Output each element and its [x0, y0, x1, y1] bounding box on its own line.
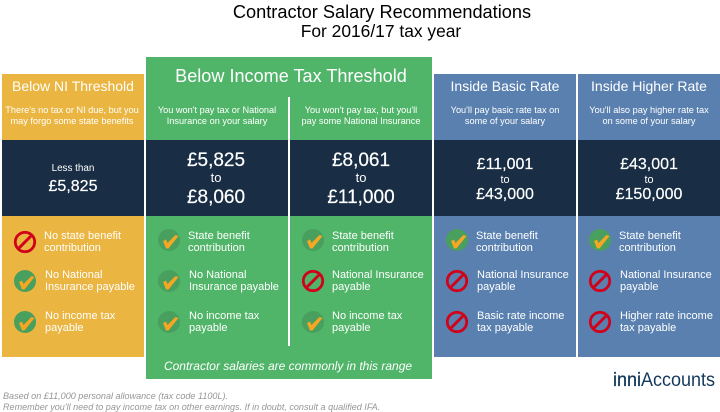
panel heading: below income tax threshold: Below Income Tax Threshold — [175, 66, 407, 86]
description: may forgo some state benefits — [10, 116, 134, 126]
description: some of your salary — [465, 116, 545, 126]
salary range: £11,001 — [477, 156, 533, 173]
salary range: column 1: £5,825 — [187, 150, 245, 171]
salary range: column 2: £11,000 — [327, 187, 395, 208]
description: column 1: Insurance on your salary — [167, 116, 268, 126]
item list: State benefit — [476, 230, 538, 242]
description: column 1 — [158, 105, 276, 126]
item list: Higher rate income — [620, 310, 713, 322]
salary range: column 2: £8,061 — [332, 150, 390, 171]
item list: column 2: payable — [332, 281, 371, 293]
item list: contribution — [619, 242, 676, 254]
item list: column 2: No income tax — [332, 310, 403, 322]
item list: column 1: contribution — [188, 242, 245, 254]
salary range: column 1 — [187, 150, 245, 208]
item list: column 2: payable — [332, 322, 371, 334]
footnote: Remember you'll need to pay income tax on other earnings. If in doubt, consult a qualified IFA. — [3, 402, 380, 412]
panel heading: inside basic rate: Inside Basic Rate — [451, 78, 560, 94]
item list: column 1 — [158, 229, 279, 334]
panel: below NI threshold — [2, 74, 144, 357]
item list: payable — [45, 322, 84, 334]
footnote — [3, 391, 380, 412]
item list: contribution — [476, 242, 533, 254]
item list: National Insurance — [477, 269, 569, 281]
salary range — [616, 156, 682, 203]
description: column 2: You won't pay tax, but you'll — [305, 105, 417, 115]
callout: Contractor salaries are commonly in this range — [164, 359, 412, 373]
item list: tax payable — [620, 322, 676, 334]
salary range: £5,825 — [49, 178, 98, 195]
panel: below income tax threshold — [146, 57, 432, 379]
description: column 2: pay some National Insurance — [302, 116, 420, 126]
title: For 2016/17 tax year — [301, 21, 461, 41]
item list: No National — [45, 269, 102, 281]
salary range: Less than — [52, 163, 94, 174]
description: There's no tax or NI due, but you — [5, 105, 139, 115]
salary range: £150,000 — [616, 186, 682, 203]
item list: column 2 — [302, 229, 424, 334]
description: column 1: You won't pay tax or National — [158, 105, 276, 115]
item list: column 1: No income tax — [189, 310, 260, 322]
salary range: column 2: to — [356, 170, 366, 185]
item list: Basic rate income — [477, 310, 564, 322]
item list: column 2: State benefit — [332, 230, 394, 242]
description: You'll also pay higher rate tax — [589, 105, 709, 115]
item list: column 1: State benefit — [188, 230, 250, 242]
description: column 2 — [302, 105, 420, 126]
item list: No state benefit — [44, 230, 121, 242]
item list: No income tax — [45, 310, 116, 322]
item list: Insurance payable — [45, 281, 135, 293]
item list: State benefit — [619, 230, 681, 242]
salary range: £43,000 — [476, 186, 534, 203]
title: Contractor Salary Recommendations — [233, 2, 531, 22]
panel heading: below NI threshold: Below NI Threshold — [12, 78, 134, 94]
item list: contribution — [44, 242, 101, 254]
item list: column 1: No National — [189, 269, 246, 281]
panel: inside higher rate — [578, 74, 720, 357]
salary range — [49, 163, 98, 195]
item list: payable — [620, 281, 659, 293]
title — [233, 2, 531, 41]
salary range — [476, 156, 534, 203]
item list: payable — [477, 281, 516, 293]
item list: column 1: Insurance payable — [189, 281, 279, 293]
description — [451, 105, 559, 126]
salary range: to — [644, 174, 654, 186]
salary range: column 2 — [327, 150, 395, 208]
item list: column 1: payable — [189, 322, 228, 334]
panel: inside basic rate — [434, 74, 576, 357]
salary range: column 1: to — [211, 170, 221, 185]
salary range: column 1: £8,060 — [187, 187, 245, 208]
item list: National Insurance — [620, 269, 712, 281]
item list — [589, 229, 713, 334]
item list: column 2: National Insurance — [332, 269, 424, 281]
salary range: £43,001 — [620, 156, 678, 173]
footnote: Based on £11,000 personal allowance (tax code 1100L). — [3, 391, 228, 401]
item list: column 2: contribution — [332, 242, 389, 254]
description — [589, 105, 709, 126]
description: on some of your salary — [603, 116, 696, 126]
salary range: to — [500, 174, 510, 186]
description — [5, 105, 139, 126]
item list — [446, 229, 569, 334]
description: You'll pay basic rate tax on — [451, 105, 559, 115]
logo: inniAccounts: inniAccounts — [613, 370, 715, 391]
panel heading: inside higher rate: Inside Higher Rate — [591, 78, 707, 94]
item list: tax payable — [477, 322, 533, 334]
item list — [14, 230, 135, 334]
